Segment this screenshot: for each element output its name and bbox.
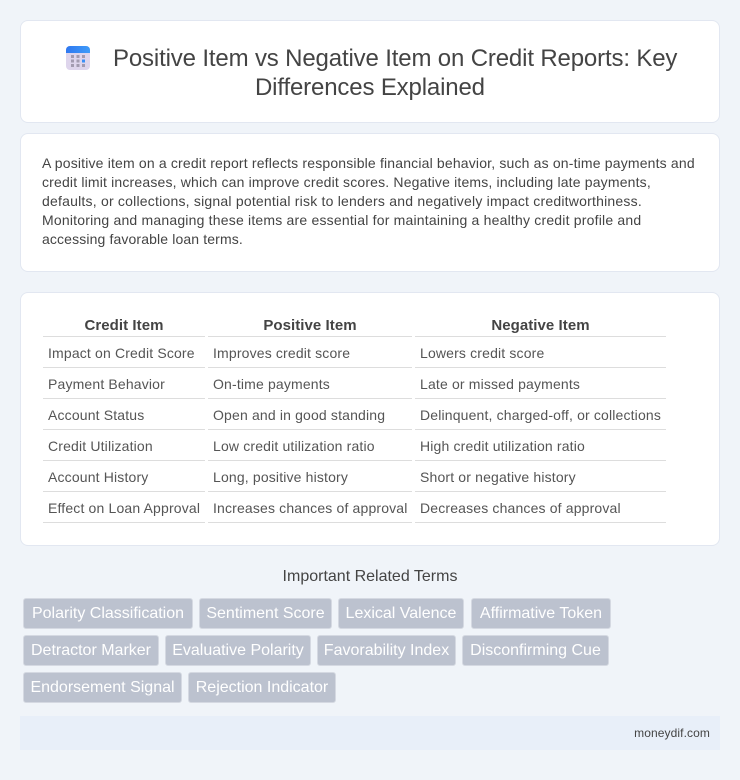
heading: important related terms: Important Related Terms xyxy=(283,568,457,585)
table header: negative item xyxy=(415,316,666,337)
row: impact on credit score xyxy=(43,345,666,368)
table header: positive item xyxy=(208,316,412,337)
tag xyxy=(199,598,332,629)
panel: comparison table xyxy=(20,292,720,546)
row: account history: Account History xyxy=(48,469,148,485)
tag: Affirmative Token xyxy=(480,605,602,622)
panel: title header xyxy=(20,20,720,123)
row: impact on credit score: Lowers credit score xyxy=(420,345,544,361)
row: payment behavior xyxy=(43,376,666,399)
row: account status: Account Status xyxy=(48,407,144,423)
summary paragraph: A positive item on a credit report reflects responsible financial behavior, such as on-time payments and xyxy=(42,155,695,171)
tag: Polarity Classification xyxy=(32,605,184,622)
title: Differences Explained xyxy=(255,74,485,101)
row: account status: Delinquent, charged-off, or collections xyxy=(420,407,661,423)
row: account history: Long, positive history xyxy=(213,469,348,485)
title xyxy=(113,45,678,101)
row: effect on loan approval: Increases chances of approval xyxy=(213,500,408,516)
summary paragraph xyxy=(42,155,695,247)
row: credit utilization: High credit utilization ratio xyxy=(420,438,585,454)
tag: Favorability Index xyxy=(324,642,449,659)
row: effect on loan approval xyxy=(43,500,666,523)
table header: negative item: Negative Item xyxy=(491,317,590,334)
tag: Rejection Indicator xyxy=(196,679,328,696)
footer source text: moneydif.com xyxy=(634,726,710,740)
row: credit utilization xyxy=(43,438,666,461)
row: account status xyxy=(43,407,666,430)
table header: credit item xyxy=(43,316,205,337)
summary paragraph: credit limit increases, which can improve credit scores. Negative items, including late payments, xyxy=(42,174,651,190)
footer bar xyxy=(20,716,720,750)
tag: Endorsement Signal xyxy=(30,679,175,696)
row: payment behavior: Payment Behavior xyxy=(48,376,165,392)
tag xyxy=(462,635,609,666)
row: effect on loan approval: Decreases chances of approval xyxy=(420,500,621,516)
row: payment behavior: On-time payments xyxy=(213,376,330,392)
row: account history: Short or negative history xyxy=(420,469,576,485)
tag: Detractor Marker xyxy=(31,642,151,659)
summary paragraph: accessing favorable loan terms. xyxy=(42,231,243,247)
tag: Disconfirming Cue xyxy=(470,642,601,659)
summary paragraph: Monitoring and managing these items are essential for maintaining a healthy credit profile and xyxy=(42,212,641,228)
row: account history xyxy=(43,469,666,492)
table header: credit item: Credit Item xyxy=(84,317,164,334)
tag xyxy=(188,672,336,703)
row: payment behavior: Late or missed payments xyxy=(420,376,580,392)
row: credit utilization: Credit Utilization xyxy=(48,438,153,454)
tag xyxy=(23,598,193,629)
tag xyxy=(338,598,464,629)
tag xyxy=(23,672,182,703)
row: impact on credit score: Improves credit score xyxy=(213,345,350,361)
tag: Sentiment Score xyxy=(206,605,325,622)
row: account status: Open and in good standing xyxy=(213,407,385,423)
summary paragraph: defaults, or collections, signal potential risk to lenders and negatively impact creditworthiness. xyxy=(42,193,642,209)
title: Positive Item vs Negative Item on Credit Reports: Key xyxy=(113,45,677,72)
tag xyxy=(317,635,456,666)
tag: Evaluative Polarity xyxy=(172,642,304,659)
icon: calendar xyxy=(66,46,90,70)
tag xyxy=(23,635,159,666)
row: impact on credit score: Impact on Credit Score xyxy=(48,345,195,361)
tag: Lexical Valence xyxy=(346,605,456,622)
table header: positive item: Positive Item xyxy=(263,317,357,334)
row: credit utilization: Low credit utilization ratio xyxy=(213,438,375,454)
row: effect on loan approval: Effect on Loan Approval xyxy=(48,500,200,516)
tag xyxy=(471,598,611,629)
tag group: related terms xyxy=(23,598,611,703)
tag xyxy=(165,635,311,666)
panel: summary text xyxy=(20,133,720,272)
